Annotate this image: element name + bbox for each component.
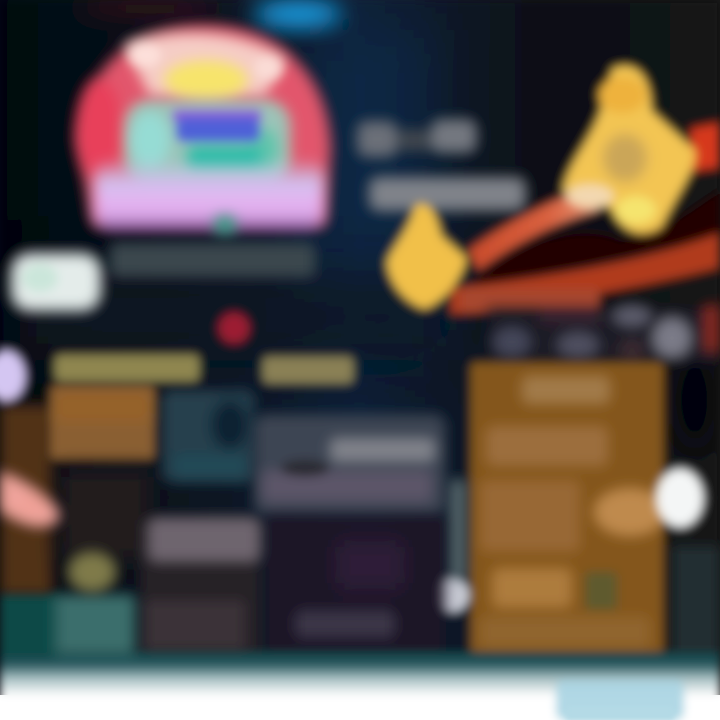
olive heading left	[54, 354, 200, 382]
dark checker strip	[488, 305, 720, 362]
yellow star small	[386, 203, 468, 310]
panel heading	[522, 376, 610, 404]
teal card bottom left	[0, 552, 135, 655]
ribbon banner	[450, 122, 720, 315]
panel text block	[486, 426, 608, 466]
olive heading centre	[262, 356, 354, 384]
panel button	[492, 568, 572, 608]
white badge left	[12, 254, 100, 310]
white page base	[0, 695, 720, 720]
left lilac badge	[0, 350, 26, 402]
red dot	[218, 312, 250, 344]
dark zone beneath brown panel	[60, 470, 150, 560]
grey card centre bottom	[140, 518, 260, 660]
dark purple card lower	[265, 515, 445, 655]
white circle lower mid	[434, 577, 470, 613]
left brown panel	[0, 385, 155, 595]
panel footer	[480, 616, 650, 648]
dark teal column right	[672, 545, 720, 660]
salmon pill	[0, 472, 60, 526]
teal footer band	[0, 652, 720, 696]
white footer	[0, 696, 720, 720]
olive marker	[68, 552, 116, 592]
rainbow dome logo	[78, 26, 330, 234]
footer blue base	[566, 706, 674, 720]
subtitle bar below logo	[110, 243, 315, 277]
grey-teal vertical strip	[450, 480, 466, 580]
panel highlight	[594, 488, 666, 536]
spotlight glow at top	[80, 0, 342, 28]
tall brown panel right	[470, 362, 666, 654]
panel text block lower	[480, 480, 580, 552]
grey purple card upper	[255, 415, 445, 515]
panel green square	[585, 572, 617, 610]
white circle right	[656, 468, 704, 528]
footer light blue button	[556, 680, 684, 720]
grey heading text right of logo	[358, 120, 525, 210]
teal card centre	[162, 390, 254, 482]
yellow star large	[562, 65, 696, 234]
